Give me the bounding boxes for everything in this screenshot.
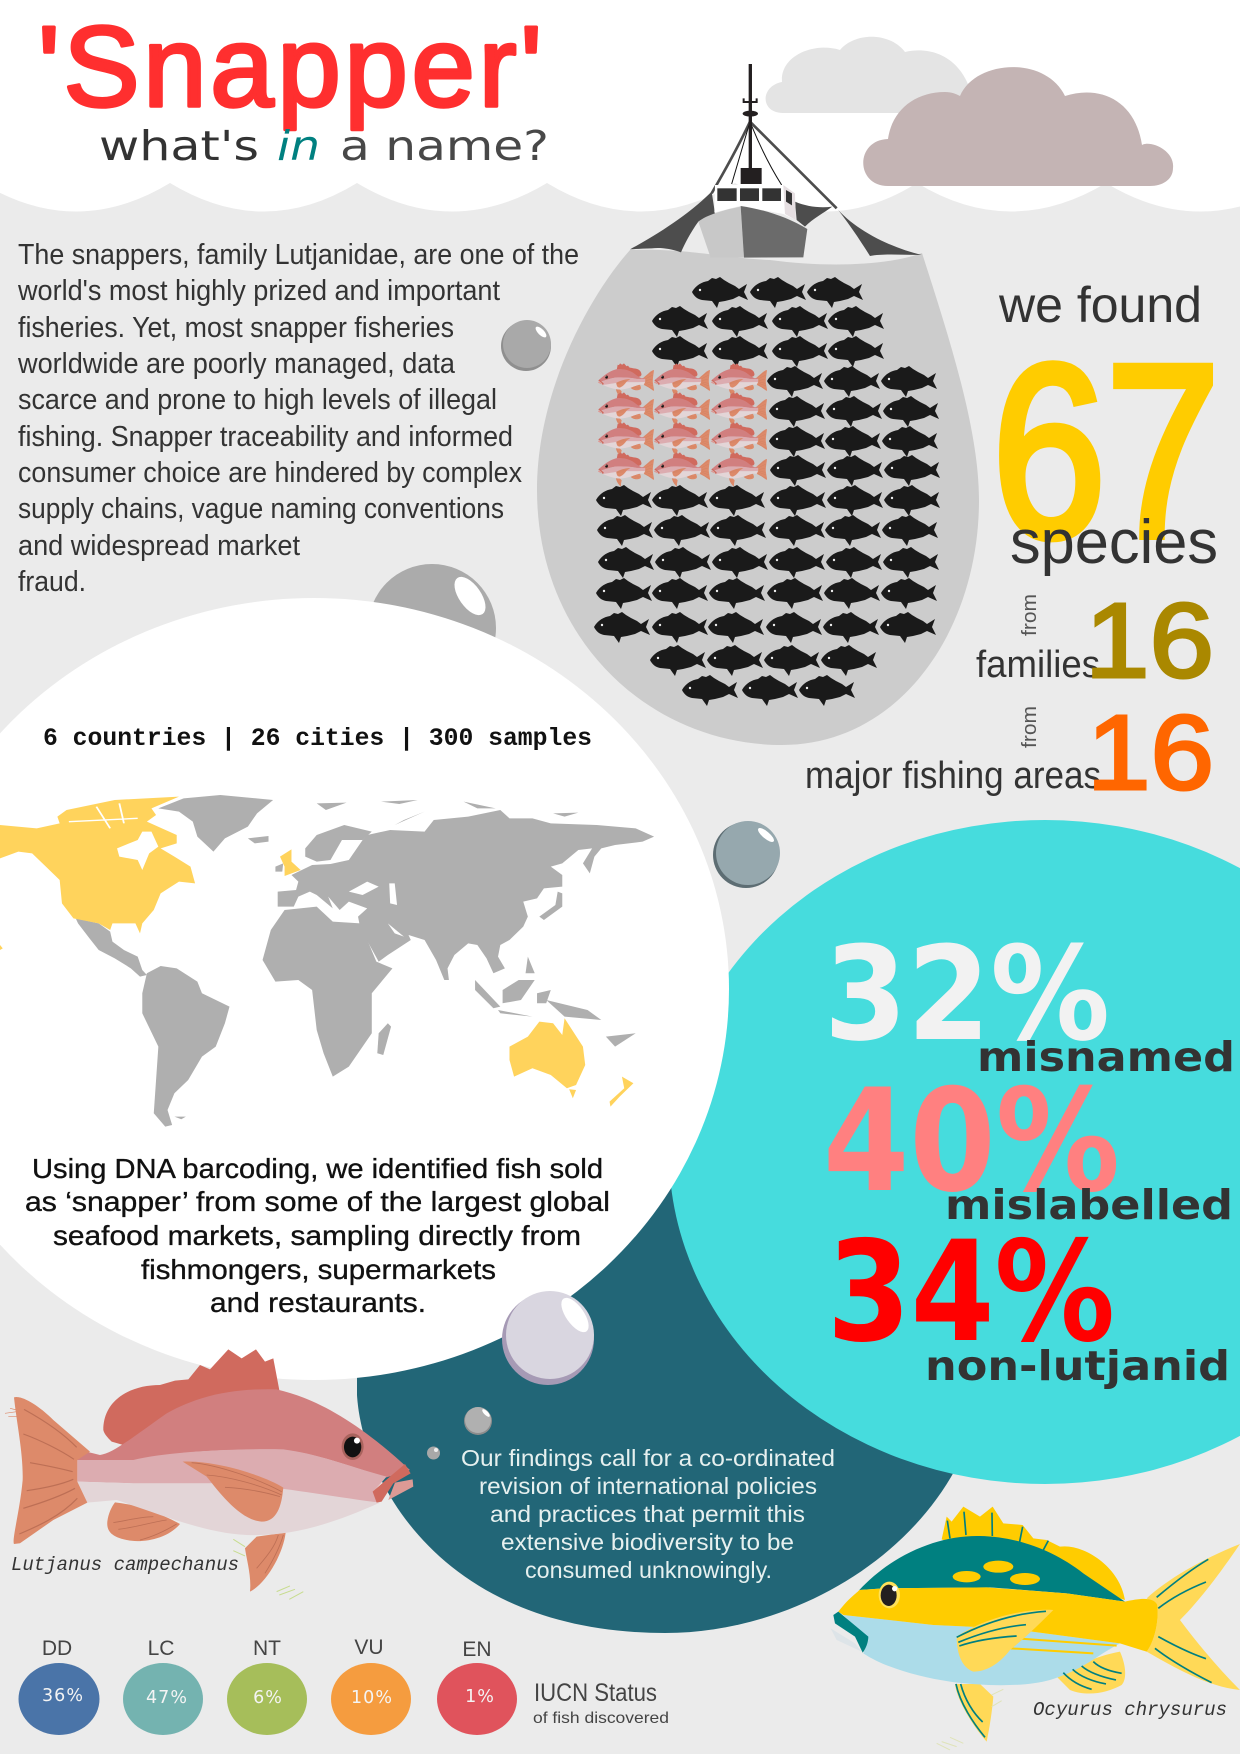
bubble: tiny grey bbox=[427, 1446, 440, 1460]
panel: dark teal conclusion circle bbox=[357, 1150, 1000, 1633]
status LC: 47% bbox=[146, 1688, 188, 1708]
right stats: species count bbox=[805, 277, 1220, 812]
legend caption bbox=[533, 1679, 669, 1727]
status LC: LC bbox=[148, 1637, 174, 1660]
intro paragraph: world's most highly prized and important bbox=[17, 275, 500, 307]
status NT bbox=[227, 1637, 307, 1735]
intro paragraph: fishing. Snapper traceability and informed bbox=[18, 421, 513, 453]
from, rotated: from bbox=[1019, 594, 1041, 636]
intro paragraph bbox=[17, 239, 579, 598]
method paragraph: seafood markets, sampling directly from bbox=[53, 1220, 581, 1251]
number 16 areas: 16 bbox=[1087, 694, 1214, 812]
method paragraph: Using DNA barcoding, we identified fish sold bbox=[32, 1153, 603, 1184]
status DD: DD bbox=[42, 1637, 72, 1660]
sampling summary: 6 countries | 26 cities | 300 samples bbox=[43, 724, 592, 753]
40 percent: 40% bbox=[823, 1059, 1120, 1224]
illustration: yellowtail snapper fish bbox=[831, 1507, 1240, 1750]
status VU: VU bbox=[354, 1636, 384, 1659]
mislabelled: mislabelled bbox=[945, 1181, 1233, 1229]
conclusion paragraph: consumed unknowingly. bbox=[525, 1557, 772, 1583]
subtitle: a name? bbox=[340, 122, 549, 170]
panel: white sampling circle bbox=[0, 598, 729, 1380]
intro paragraph: fisheries. Yet, most snapper fisheries bbox=[18, 312, 454, 344]
status DD bbox=[18, 1637, 100, 1735]
number 16 families: 16 bbox=[1085, 582, 1214, 700]
status VU: 10% bbox=[351, 1688, 393, 1708]
status NT: NT bbox=[253, 1637, 281, 1660]
intro paragraph: worldwide are poorly managed, data bbox=[17, 348, 456, 380]
non-lutjanid: non-lutjanid bbox=[925, 1342, 1230, 1390]
species label: Ocyurus chrysurus: Ocyurus chrysurus bbox=[1033, 1699, 1227, 1721]
families: families bbox=[976, 644, 1100, 686]
subtitle: in bbox=[277, 122, 320, 170]
bubble: large grey behind map circle bbox=[368, 564, 496, 692]
IUCN status legend bbox=[18, 1636, 669, 1735]
intro paragraph: supply chains, vague naming conventions bbox=[18, 493, 504, 525]
cloud: mauve grey bbox=[863, 67, 1173, 186]
cloud: light grey bbox=[766, 37, 975, 113]
bubble: small grey top bbox=[501, 320, 551, 371]
bubble: blue-grey bbox=[713, 821, 780, 888]
status LC bbox=[123, 1637, 203, 1735]
world map with sampled countries highlighted bbox=[0, 795, 654, 1127]
34 percent: 34% bbox=[827, 1211, 1115, 1373]
bubble: large lilac bbox=[502, 1291, 594, 1385]
major fishing areas: major fishing areas bbox=[805, 755, 1101, 797]
intro paragraph: consumer choice are hindered by complex bbox=[18, 457, 522, 489]
fishing boat bbox=[630, 64, 922, 258]
32 percent: 32% bbox=[824, 918, 1110, 1070]
status EN: EN bbox=[462, 1638, 492, 1661]
fish shoal: 1 in 5 highlighted as red snapper bbox=[594, 277, 940, 706]
legend caption: of fish discovered bbox=[533, 1710, 669, 1727]
intro paragraph: scarce and prone to high levels of illegal bbox=[18, 384, 497, 416]
intro paragraph: and widespread market bbox=[18, 530, 300, 562]
status DD: 36% bbox=[42, 1686, 84, 1706]
status EN: 1% bbox=[465, 1687, 495, 1707]
status NT: 6% bbox=[253, 1688, 283, 1708]
method paragraph: as ‘snapper’ from some of the largest global bbox=[25, 1186, 610, 1217]
conclusion paragraph: and practices that permit this bbox=[490, 1501, 805, 1527]
title: 'Snapper' bbox=[38, 4, 542, 131]
illustration: red snapper fish bbox=[5, 1349, 413, 1599]
species: species bbox=[1010, 508, 1218, 577]
species label: Lutjanus campechanus: Lutjanus campechanus bbox=[11, 1554, 239, 1576]
method paragraph bbox=[25, 1153, 610, 1318]
results: percentages bbox=[823, 918, 1235, 1390]
misnamed: misnamed bbox=[977, 1033, 1235, 1081]
panel: turquoise results circle bbox=[669, 820, 1240, 1484]
conclusion paragraph bbox=[461, 1445, 835, 1583]
intro paragraph: fraud. bbox=[18, 566, 86, 598]
net bag bbox=[537, 250, 979, 745]
method paragraph: fishmongers, supermarkets bbox=[141, 1254, 496, 1285]
bubble: small grey bbox=[464, 1407, 492, 1435]
method paragraph: and restaurants. bbox=[210, 1287, 426, 1318]
we found: we found bbox=[998, 277, 1202, 333]
intro paragraph: The snappers, family Lutjanidae, are one of the bbox=[18, 239, 579, 271]
conclusion paragraph: revision of international policies bbox=[479, 1473, 817, 1499]
status VU bbox=[331, 1636, 411, 1735]
subtitle bbox=[99, 122, 549, 170]
subtitle: what's bbox=[99, 122, 259, 170]
conclusion paragraph: extensive biodiversity to be bbox=[501, 1529, 794, 1555]
legend caption: IUCN Status bbox=[534, 1679, 657, 1707]
conclusion paragraph: Our findings call for a co-ordinated bbox=[461, 1445, 835, 1471]
status EN bbox=[437, 1638, 517, 1735]
from, rotated: from bbox=[1019, 706, 1041, 748]
sky with scalloped waves bbox=[0, 0, 1240, 212]
